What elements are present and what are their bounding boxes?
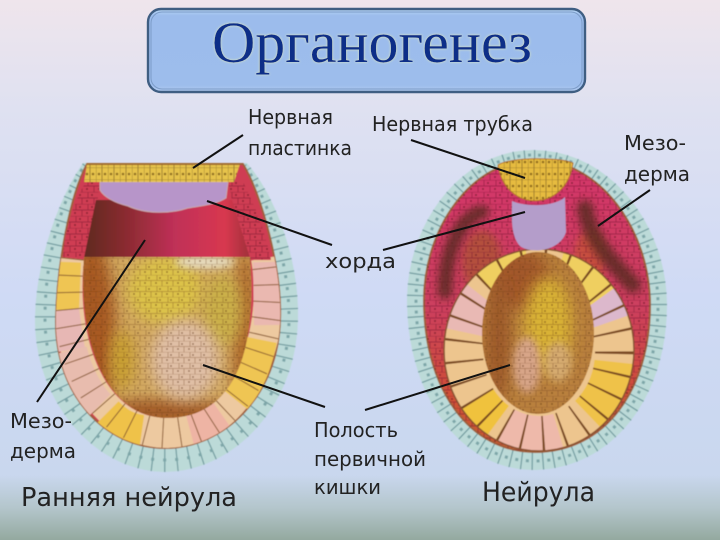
- mesoderm: [424, 160, 650, 452]
- dark coelom left: [445, 212, 482, 292]
- label: neural tube: Нервная трубка: [372, 112, 533, 136]
- label: mesoderm right: Мезо-: [624, 131, 686, 155]
- label: mesoderm left: Мезо-: [10, 409, 72, 433]
- neural tube: [498, 159, 573, 201]
- label: mesoderm right line 2: дерма: [624, 162, 690, 186]
- endoderm cell layer: [64, 258, 269, 433]
- label: notochord: хорда: [325, 249, 396, 273]
- dark coelom right: [585, 208, 633, 285]
- yolk / primary gut cavity: [82, 256, 252, 418]
- early neurula embryo diagram: [35, 163, 298, 472]
- label: mesoderm left line 2: дерма: [10, 439, 76, 463]
- ectoderm ring: [407, 150, 667, 470]
- caption: early neurula: Ранняя нейрула: [21, 483, 237, 513]
- title text: Органогенез: [212, 10, 532, 75]
- yolk / primary gut cavity: [480, 250, 596, 416]
- pointer lines: [37, 135, 650, 410]
- neurula embryo diagram: [407, 150, 667, 470]
- ectoderm ring: [35, 163, 298, 472]
- endoderm outline: [444, 249, 634, 451]
- title banner: [148, 9, 585, 92]
- label: primary gut: Полость: [314, 418, 398, 442]
- label: neural plate line 2: пластинка: [248, 136, 352, 160]
- label: neural plate: Нервная: [248, 105, 333, 129]
- neural plate: [84, 164, 240, 182]
- caption: neurula: Нейрула: [482, 477, 595, 508]
- label: primary gut line 2: первичной: [314, 447, 426, 471]
- label: primary gut line 3: кишки: [314, 475, 381, 499]
- body wall: [56, 164, 280, 448]
- notochord: [100, 182, 228, 212]
- mesoderm side blocks: [63, 182, 271, 260]
- notochord: [512, 197, 566, 250]
- red roof of primary gut: [84, 200, 250, 258]
- endoderm cell ring: [444, 249, 634, 451]
